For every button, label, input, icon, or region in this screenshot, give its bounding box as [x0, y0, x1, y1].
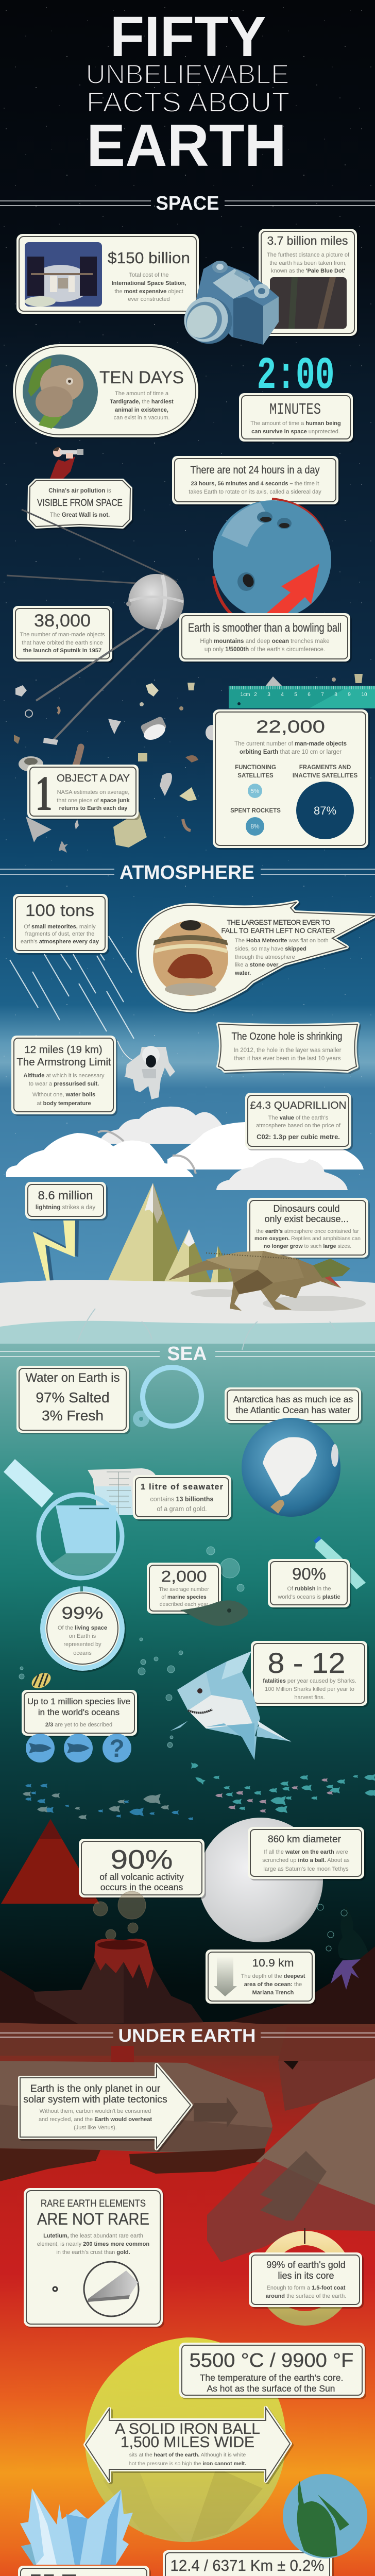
- panel: atmosphere value: [245, 1093, 351, 1149]
- body text: lightning strikes a day: [36, 1205, 95, 1211]
- body text: can exist in a vacuum.: [114, 415, 169, 421]
- body text: more oxygen. Reptiles and amphibians can: [254, 1235, 361, 1242]
- heading large: ARE NOT RARE: [37, 2210, 149, 2228]
- heading: 1,500 MILES WIDE: [121, 2434, 254, 2451]
- illustration: mountains: [108, 1183, 235, 1299]
- ruler: 1cm: [241, 692, 250, 698]
- heading: atmosphere: ATMOSPHERE: [120, 862, 254, 884]
- body text: fragments of dust, enter the: [25, 931, 94, 937]
- ruler: 2: [254, 692, 257, 698]
- chart: one third unknown fish icons: [26, 1734, 131, 1762]
- ruler: 9: [348, 692, 351, 698]
- panel: 1 million species: [22, 1690, 137, 1736]
- body text: High mountains and deep ocean trenches make: [200, 638, 330, 645]
- panel: 90 percent plastic: [268, 1559, 350, 1607]
- body text: the earth's atmosphere once contained far: [256, 1228, 359, 1234]
- title: UNBELIEVABLE: [86, 59, 289, 90]
- body text: in the earth's crust than gold.: [56, 2249, 130, 2256]
- body text: sits at the heart of the earth. Although it is white: [129, 2452, 246, 2458]
- body text: represented by: [63, 1641, 101, 1648]
- body text: animal in existence,: [115, 407, 168, 413]
- icon: bubble ring: [133, 1367, 201, 1427]
- heading: £4.3 QUADRILLION: [250, 1100, 346, 1111]
- heading: The Ozone hole is shrinking: [232, 1031, 342, 1042]
- title: FIFTY: [110, 5, 266, 69]
- panel: minutes: [239, 393, 353, 442]
- body text: takes Earth to rotate on its axis, called a sidereal day: [189, 489, 321, 495]
- panel: ozone hole: [218, 1024, 357, 1071]
- chart: gold ring: [265, 2228, 345, 2318]
- panel: armstrong limit: [11, 1036, 116, 1114]
- body text: The Great Wall is not.: [50, 512, 110, 518]
- panel: 100 tons meteorites: [13, 894, 108, 953]
- body text: at body temperature: [37, 1100, 91, 1107]
- heading: 99%: [62, 1603, 103, 1622]
- body text: The amount of time a: [115, 391, 169, 397]
- icon: volcano triangle: [1, 1819, 99, 1904]
- body text: (Just like Venus).: [74, 2125, 117, 2131]
- heading: 12 miles (19 km): [24, 1044, 103, 1056]
- heading: 99% of earth's gold: [266, 2260, 346, 2270]
- ruler: 10: [361, 692, 367, 698]
- body text: through the atmosphere: [235, 954, 295, 960]
- legend labels: INACTIVE SATELLITES: [293, 773, 357, 779]
- body text: the most expensive object: [114, 289, 183, 295]
- heading: 10.9 km: [252, 1957, 294, 1969]
- body text: area of the ocean: the: [244, 1981, 302, 1988]
- heading: 97% Salted: [36, 1389, 110, 1405]
- subheading: The temperature of the earth's core.: [200, 2372, 343, 2383]
- panel: 55 tonnes crystals: [18, 2566, 149, 2576]
- background: under earth: [0, 2024, 375, 2576]
- panel: 99 percent living space: [40, 1586, 125, 1671]
- heading: There are not 24 hours in a day: [191, 464, 320, 476]
- body text: Mariana Trench: [252, 1990, 294, 1996]
- heading: sea: [0, 1343, 375, 1365]
- body text: can survive in space unprotected.: [251, 429, 340, 435]
- body text: The current number of man-made objects: [234, 741, 347, 747]
- panel: 10.9 km trench: [206, 1950, 315, 2004]
- heading: Earth is the only planet in our: [30, 2083, 161, 2094]
- panel: 97 percent salted: [16, 1366, 129, 1433]
- ruler: [229, 686, 375, 708]
- icon: reef fish: [180, 1600, 248, 1626]
- body text: the earth has been taken from,: [269, 260, 347, 266]
- panel: smoother than a bowling ball: [179, 613, 350, 662]
- panel: rare earth elements: [24, 2188, 163, 2327]
- icon: bubbles: [19, 1547, 244, 1748]
- photo: international space station: [25, 242, 102, 307]
- body text: sides, so may have skipped: [235, 946, 306, 952]
- heading: 22,000: [256, 717, 325, 737]
- body text: on Earth is: [69, 1633, 96, 1639]
- heading: The Armstrong Limit: [16, 1056, 111, 1068]
- heading: space: [0, 193, 375, 214]
- heading: lies in its core: [278, 2270, 334, 2281]
- body text: large as Saturn's Ice moon Tethys: [263, 1866, 349, 1872]
- body text: The number of man-made objects: [20, 632, 105, 638]
- body text: scrunched up into a ball. About as: [262, 1857, 350, 1863]
- icon: plastic bottle: [314, 1536, 366, 1589]
- heading: 38,000: [34, 611, 91, 631]
- body text: than it has ever been in the last 10 years: [234, 1056, 341, 1062]
- panel: 22000 objects: [213, 709, 368, 848]
- heading: THE LARGEST METEOR EVER TO: [227, 919, 331, 926]
- icon: man with telescope: [50, 447, 83, 479]
- body text: hot the pressure is so high the iron cannot melt.: [129, 2461, 246, 2467]
- panel: core temperature: [179, 2343, 365, 2398]
- panel: 99 percent gold: [249, 2252, 362, 2307]
- heading: A SOLID IRON BALL: [115, 2420, 260, 2437]
- illustration: school of fish left: [23, 1784, 193, 1820]
- legend labels: FUNCTIONING: [235, 765, 276, 771]
- body text: C02: 1.3p per cubic metre.: [257, 1133, 340, 1141]
- heading: 5500 °C / 9900 °F: [190, 2350, 353, 2371]
- panel: ten days tardigrade: [13, 344, 198, 437]
- illustration: sea-floor rock plates: [0, 2027, 375, 2262]
- heading: $150 billion: [108, 249, 190, 267]
- body text: 100 Million Sharks killed per year to: [265, 1686, 354, 1692]
- heading: under earth: UNDER EARTH: [118, 2026, 255, 2046]
- body text: no longer grow to such large sizes.: [264, 1243, 351, 1249]
- body text: The furthest distance a picture of: [267, 252, 350, 258]
- background: sea: [0, 1344, 375, 2026]
- body text: Enough to form a 1.5-foot coat: [267, 2285, 345, 2291]
- illustration: seaweed and small bubbles: [317, 1904, 368, 1963]
- heading: in the world's oceans: [38, 1707, 120, 1717]
- icon: sputnik satellite: [7, 510, 184, 742]
- background: shallow water: [0, 1321, 375, 1350]
- legend labels: FRAGMENTS AND: [299, 765, 351, 771]
- body text: In 2012, the hole in the layer was smaller: [233, 1047, 342, 1054]
- panel: largest meteor comet: [139, 902, 375, 1010]
- ruler: 5: [294, 692, 297, 698]
- decorative cracks: [77, 1309, 335, 1350]
- heading: 8 - 12: [268, 1647, 345, 1679]
- panel: 38000 objects: [13, 606, 112, 662]
- heading: under earth: [0, 2026, 375, 2046]
- subheading: As hot as the surface of the Sun: [207, 2383, 335, 2394]
- body text: harvest fins.: [294, 1694, 325, 1701]
- body text: International Space Station,: [112, 280, 186, 286]
- chart: 87 percent: [296, 782, 354, 839]
- icon: camera: [176, 261, 279, 352]
- chart: 87 percent: 87%: [314, 804, 336, 817]
- icon: sakhalin globe: [283, 2474, 367, 2558]
- big numeral: 1: [35, 766, 53, 821]
- heading: Water on Earth is: [26, 1371, 120, 1385]
- heading: 100 tons: [25, 901, 94, 920]
- body text: Of rubbish in the: [287, 1586, 331, 1592]
- panel: one object a day: [27, 765, 139, 821]
- chart: 5 percent: 5%: [251, 788, 259, 794]
- body text: Without one, water boils: [32, 1092, 95, 1098]
- heading: 3% Fresh: [42, 1408, 104, 1423]
- body text: of a gram of gold.: [157, 1505, 207, 1513]
- heading: 2,000: [161, 1567, 207, 1585]
- heading: VISIBLE FROM SPACE: [37, 498, 123, 509]
- panel: 150 billion space station: [16, 234, 199, 314]
- panel: 8 to 12 fatalities: [251, 1641, 367, 1706]
- background: left sea floor: [0, 1970, 79, 2024]
- photo: hoba meteorite: [153, 920, 228, 996]
- chart: 8 percent: 8%: [250, 823, 260, 830]
- heading: 860 km diameter: [268, 1834, 342, 1845]
- legend labels: SPENT ROCKETS: [230, 808, 281, 814]
- ruler: 6: [308, 692, 311, 698]
- body text: element, is nearly 200 times more common: [37, 2241, 149, 2247]
- chart: one third unknown fish icons: ?: [109, 1735, 125, 1762]
- heading: atmosphere: [0, 862, 375, 884]
- heading: RARE EARTH ELEMENTS: [41, 2198, 146, 2209]
- icon: volcanic bubbles: [93, 1891, 146, 1940]
- body text: Of small meteorites, mainly: [24, 924, 96, 930]
- icon: t-rex: [168, 1251, 366, 1311]
- heading: only exist because...: [264, 1214, 349, 1224]
- icon: crystals: [20, 2488, 133, 2565]
- heading: OBJECT A DAY: [57, 773, 130, 784]
- heading: 90%: [292, 1565, 326, 1583]
- body text: China's air pollution is: [48, 488, 111, 494]
- title: FACTS ABOUT: [87, 86, 289, 118]
- illustration: earth core: [85, 2337, 286, 2542]
- clock digits: 2:00: [257, 351, 335, 402]
- heading: solar system with plate tectonics: [23, 2094, 167, 2105]
- body text: 23 hours, 56 minutes and 4 seconds – the time it: [191, 481, 319, 487]
- body text: like a stone over: [235, 962, 278, 968]
- heading: space: SPACE: [156, 193, 219, 214]
- body text: The value of the earth's: [268, 1115, 328, 1121]
- heading: 8.6 million: [38, 1189, 93, 1202]
- body text: Of the living space: [58, 1625, 107, 1631]
- photo: tardigrade: [23, 354, 98, 429]
- heading: Up to 1 million species live: [27, 1697, 130, 1706]
- ruler: 3: [267, 692, 270, 698]
- title: [86, 5, 289, 179]
- body text: described each year: [160, 1601, 209, 1607]
- background: space and sky: [0, 0, 375, 1288]
- heading: 3.7 billion miles: [267, 234, 348, 247]
- body text: ever constructed: [128, 296, 170, 302]
- ruler: 4: [281, 692, 284, 698]
- body text: NASA estimates on average,: [57, 789, 129, 795]
- icon: astronaut: [117, 1041, 175, 1099]
- illustration: clouds: [6, 1107, 364, 1190]
- body text: orbiting Earth that are 10 cm or larger: [240, 749, 342, 755]
- ruler: 8: [334, 692, 337, 698]
- legend labels: SATELLITES: [237, 773, 274, 779]
- body text: up only 1/5000th of the earth's circumference.: [204, 647, 325, 653]
- subheading: occurs in the oceans: [100, 1882, 183, 1892]
- body text: 2/3 are yet to be described: [45, 1722, 112, 1728]
- body text: around the surface of the earth.: [266, 2293, 346, 2299]
- photo: pale blue dot: [270, 277, 347, 329]
- panel: 24 hours: [172, 456, 338, 504]
- icon: measuring cup and magnifier: [4, 1459, 158, 1578]
- body text: to wear a pressurised suit.: [29, 1081, 99, 1087]
- icon: lightning bolt: [33, 1221, 79, 1306]
- chart: gold versus lutetium: [53, 2262, 139, 2316]
- body text: that one piece of space junk: [57, 798, 130, 804]
- space debris: [14, 674, 363, 853]
- body text: contains 13 billionths: [150, 1496, 213, 1503]
- icon: starfish: [331, 1959, 361, 1990]
- body text: Without them, carbon wouldn't be consumed: [40, 2108, 151, 2114]
- heading: 1 litre of seawater: [141, 1483, 223, 1492]
- body text: Tardigrade, the hardiest: [110, 399, 174, 405]
- body text: and recycled, and the Earth would overheat: [39, 2116, 152, 2123]
- body text: earth's atmosphere every day: [21, 939, 99, 945]
- body text: returns to Earth each day: [59, 805, 128, 811]
- heading: FALL TO EARTH LEFT NO CRATER: [221, 927, 335, 935]
- panel: 3.7 billion miles: [259, 229, 357, 336]
- body text: Altitude at which it is necessary: [23, 1073, 105, 1079]
- background: snow: [0, 1280, 375, 1345]
- panel: 2000 marine species: [147, 1563, 221, 1614]
- title: EARTH: [87, 112, 286, 179]
- panel: 860 km diameter: [248, 1827, 364, 1879]
- icon: undersea volcano: [33, 1939, 203, 2024]
- illustration: school of fish right: [191, 1762, 375, 1813]
- chart: 5 percent: [248, 784, 262, 798]
- body text: fatalities per year caused by Sharks.: [263, 1678, 356, 1684]
- body text: that have orbited the earth since: [22, 640, 103, 646]
- background: star field: [0, 0, 375, 1185]
- icon: bowling ball: [213, 499, 331, 619]
- body text: of marine species: [161, 1594, 207, 1600]
- body text: oceans: [73, 1650, 92, 1656]
- heading: MINUTES: [269, 401, 321, 419]
- panel: 8.6 million lightning: [25, 1182, 106, 1219]
- heading: TEN DAYS: [99, 368, 184, 387]
- panel: solid iron ball double arrow: [86, 2408, 290, 2481]
- body text: The amount of time a human being: [250, 420, 341, 427]
- icon: shark: [170, 1651, 292, 1760]
- body text: The depth of the deepest: [241, 1973, 305, 1979]
- body text: Lutetium, the least abundant rare earth: [43, 2233, 143, 2239]
- body text: the launch of Sputnik in 1957: [23, 648, 101, 654]
- heading: 12.4 / 6371 Km ± 0.2%: [170, 2556, 325, 2574]
- heading: Antarctica has as much ice as: [233, 1394, 353, 1404]
- heading: sea: SEA: [167, 1343, 207, 1365]
- body text: If all the water on the earth were: [264, 1849, 348, 1855]
- panel: china air pollution: [29, 481, 130, 527]
- body text: Total cost of the: [129, 272, 169, 278]
- photo: antarctica globe: [242, 1418, 340, 1517]
- panel: dinosaurs oxygen: [247, 1198, 368, 1258]
- heading: Dinosaurs could: [273, 1204, 340, 1214]
- heading: 90%: [110, 1845, 173, 1875]
- icon: striped fish: [29, 1670, 54, 1691]
- heading: the Atlantic Ocean has water: [236, 1405, 351, 1415]
- subheading: of all volcanic activity: [99, 1872, 184, 1882]
- chart: snowball of all water: [198, 1818, 323, 1942]
- body text: The average number: [159, 1586, 209, 1592]
- meteor streaks: [10, 936, 134, 1039]
- body text: The Hoba Meteorite was flat on both: [235, 938, 329, 944]
- panel: 90 percent volcanic activity: [79, 1839, 204, 1897]
- icon: down arrow: [214, 1957, 237, 1996]
- panel: gold in seawater: [133, 1475, 231, 1519]
- body text: world's oceans is plastic: [278, 1594, 340, 1600]
- panel: plate tectonics arrow: [20, 2065, 191, 2148]
- panel: deepest borehole: [163, 2550, 332, 2576]
- body text: known as the 'Pale Blue Dot': [271, 268, 345, 274]
- body text: water.: [234, 970, 251, 976]
- body text: atmosphere based on the price of: [256, 1123, 341, 1129]
- background: right rock: [230, 1946, 375, 2027]
- panel: antarctica: [225, 1387, 361, 1423]
- ruler: 7: [321, 692, 324, 698]
- chart: 8 percent: [246, 817, 264, 836]
